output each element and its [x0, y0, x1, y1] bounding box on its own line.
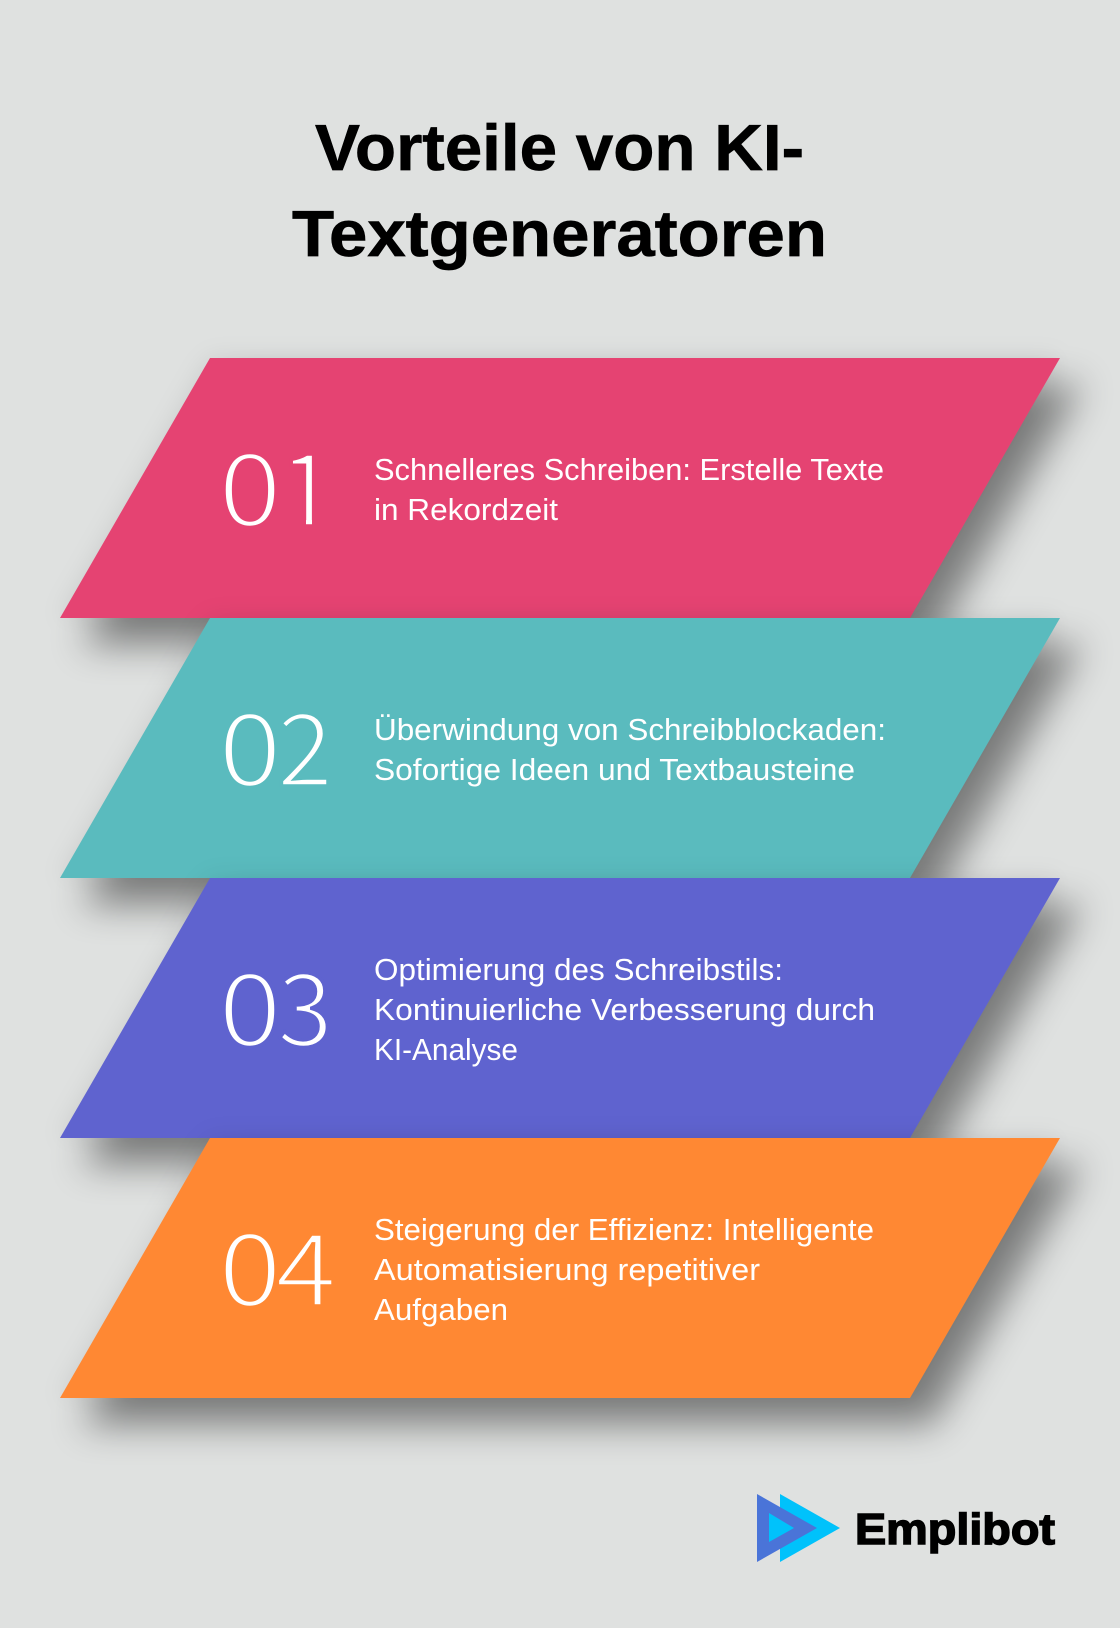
text: item 3: KI-Analyse [374, 1032, 518, 1067]
text: item 2 [374, 712, 886, 787]
title: Vorteile von KI- [315, 111, 804, 184]
panel: 04 Steigerung der Effizienz [60, 1138, 1060, 1398]
wordmark: Emplibot [855, 1505, 1055, 1554]
number 02 [218, 669, 333, 816]
panel: 02 Überwindung von Schreibblockaden [60, 618, 1060, 878]
number 01 [226, 454, 312, 526]
number 01: 0 [218, 409, 282, 556]
number 03: 3 [277, 930, 333, 1076]
number 02: 0 [218, 669, 282, 816]
number 03: 0 [218, 929, 282, 1076]
text: item 4: Automatisierung repetitiver [374, 1252, 760, 1287]
text: item 1 [374, 452, 884, 527]
text: item 4: Steigerung der Effizienz: Intelligente [374, 1212, 874, 1247]
text: item 2: Sofortige Ideen und Textbausteine [374, 752, 855, 787]
text: item 3: Optimierung des Schreibstils: [374, 952, 783, 987]
icon: play triangles [757, 1494, 840, 1562]
logo: Emplibot [757, 1494, 1055, 1562]
text: item 3 [374, 952, 875, 1067]
title: Textgeneratoren [292, 197, 827, 270]
panel: 01 Schnelleres Schreiben [60, 358, 1060, 618]
text: item 2: Überwindung von Schreibblockaden: [374, 712, 886, 747]
number 02: 2 [277, 670, 333, 816]
number 04: 0 [218, 1189, 282, 1336]
text: item 4 [374, 1212, 874, 1327]
parallelogram: orange [60, 1138, 1060, 1398]
number 04 [218, 1189, 337, 1336]
parallelogram: indigo [60, 878, 1060, 1138]
text: item 1: Schnelleres Schreiben: Erstelle Texte [374, 452, 884, 487]
parallelogram: pink [60, 358, 1060, 618]
text: item 3: Kontinuierliche Verbesserung durch [374, 992, 875, 1027]
text: item 4: Aufgaben [374, 1292, 508, 1327]
number 01: 1 [279, 410, 335, 556]
parallelogram: teal [60, 618, 1060, 878]
title [292, 111, 827, 270]
panel: 03 Optimierung des Schreibstils [60, 878, 1060, 1138]
number 04: 4 [275, 1189, 337, 1335]
text: item 1: in Rekordzeit [374, 492, 558, 527]
number 03 [218, 929, 333, 1076]
